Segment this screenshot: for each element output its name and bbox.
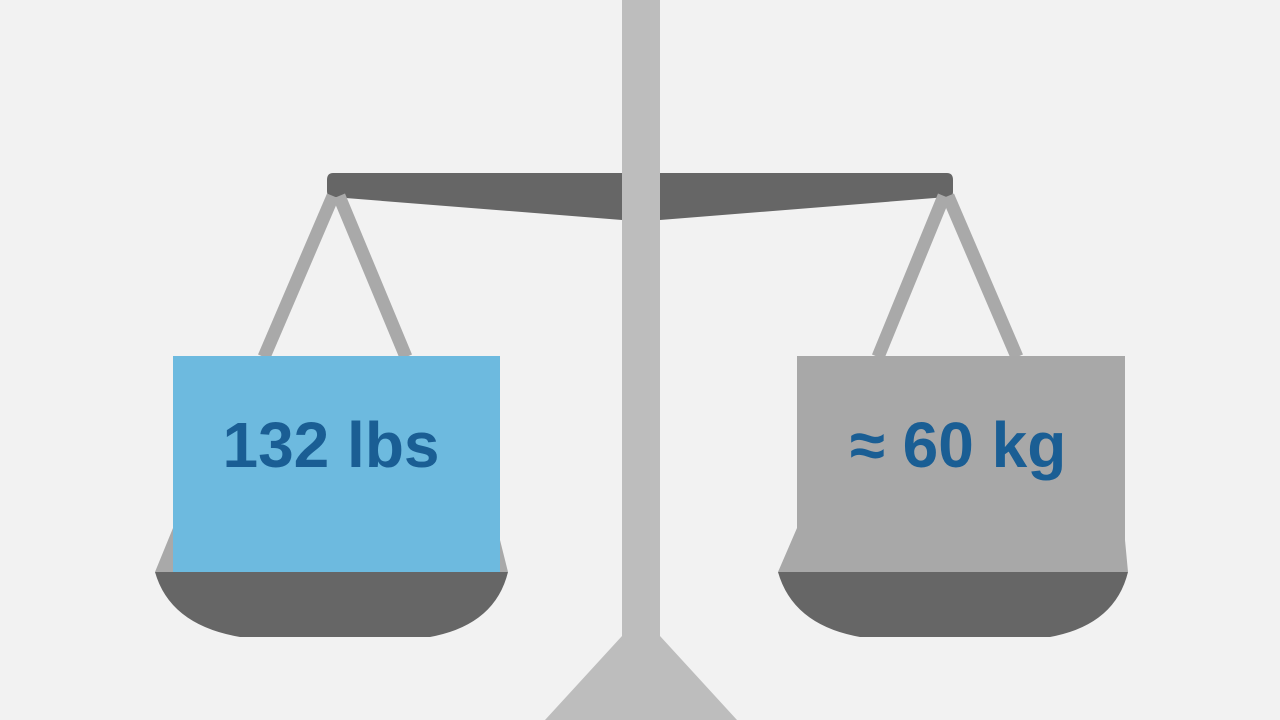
box: 132 lbs (173, 356, 500, 572)
right pan with weight box (778, 356, 1128, 637)
box: approx 60 kg (797, 356, 1125, 572)
box: approx 60 kg: ≈ 60 kg (850, 409, 1066, 481)
beam (327, 173, 953, 220)
box: 132 lbs: 132 lbs (222, 409, 440, 481)
left bowl (155, 572, 508, 637)
right bowl (778, 572, 1128, 637)
left strings (264, 196, 406, 357)
right strings (878, 196, 1017, 357)
base triangle (545, 636, 737, 720)
left pan with weight box (155, 356, 508, 637)
central pole (622, 0, 660, 640)
